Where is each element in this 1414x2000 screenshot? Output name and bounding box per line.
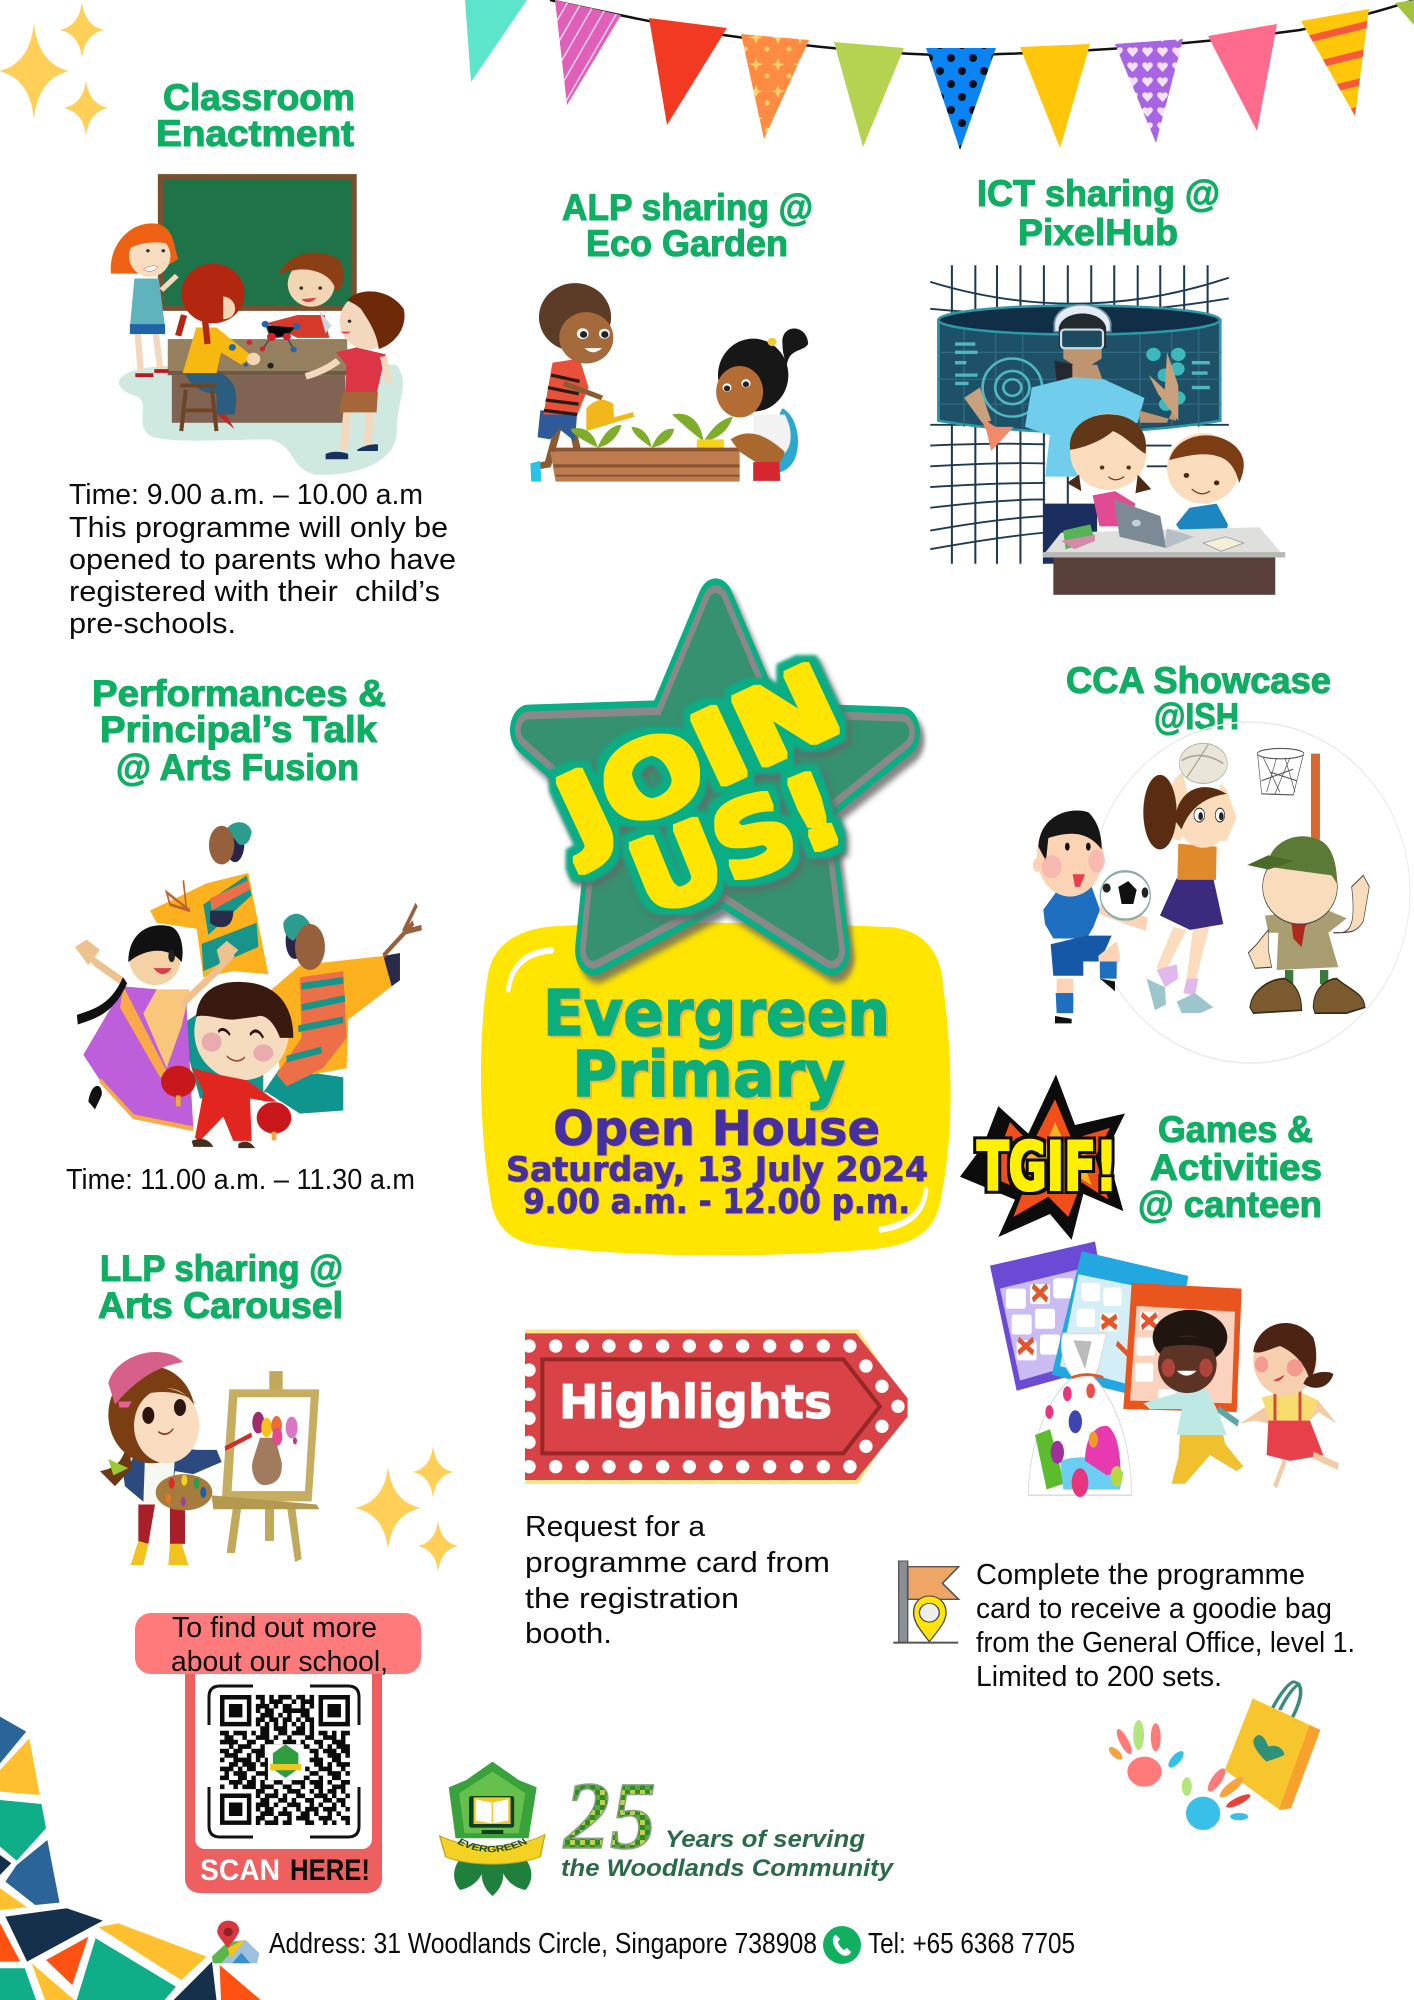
time and registration note: This programme will only be (69, 512, 448, 544)
JOIN US lettering (534, 642, 858, 939)
icon: map pin (212, 1921, 259, 1963)
text: request programme card: programme card from (525, 1547, 830, 1579)
sign board (522, 1329, 908, 1484)
heading: CCA showcase (1066, 660, 1331, 737)
heading: games and activities: Games & (1158, 1109, 1313, 1150)
heading: games and activities: @ canteen (1138, 1184, 1322, 1225)
anniversary tagline: Years of serving (665, 1826, 865, 1853)
address: Address: 31 Woodlands Circle, Singapore 738908 (269, 1928, 817, 1960)
time and registration note (69, 479, 456, 640)
icon: goodie bag and painted hands (1106, 1682, 1320, 1830)
25 years mark: 25 (562, 1762, 656, 1869)
text: request programme card: Request for a (525, 1511, 706, 1543)
JOIN US lettering: US! (615, 750, 858, 939)
heading: classroom enactment: Classroom (163, 77, 355, 118)
callout tab: To find out more (172, 1612, 377, 1644)
heading: LLP sharing: Arts Carousel (98, 1285, 343, 1326)
school name (543, 977, 890, 1111)
illustration: girl painting at easel (100, 1352, 319, 1565)
text: request programme card: the registration (525, 1583, 739, 1615)
scan here label (200, 1854, 370, 1887)
heading: ICT sharing: PixelHub (1018, 212, 1178, 253)
school name: Primary (572, 1038, 845, 1111)
yellow info blob (481, 923, 951, 1255)
star badge (528, 604, 906, 958)
icon: TGIF burst (960, 1075, 1125, 1240)
icon: phone (823, 1926, 861, 1964)
time and registration note: pre-schools. (69, 608, 236, 640)
crest shield: EVERGREEN (457, 1838, 528, 1852)
heading: games and activities: Activities (1150, 1147, 1322, 1188)
school name: Evergreen (543, 977, 890, 1050)
text: request programme card: booth. (525, 1618, 612, 1650)
sign label: Highlights (559, 1375, 832, 1429)
time and registration note: registered with their child’s (69, 576, 440, 608)
bunting banner (465, 0, 1414, 150)
illustration: sports and scout children (1033, 722, 1410, 1063)
panel: central open house badge (481, 604, 951, 1255)
illustration: children in classroom (111, 174, 405, 475)
icon: sparkles top left (0, 2, 108, 136)
school crest logo (438, 1762, 895, 1896)
illustration: dancers and children (75, 822, 422, 1148)
heading: classroom enactment: Enactment (156, 113, 354, 154)
heading: classroom enactment (156, 77, 355, 154)
illustration: bingo cards, goodie sack and children (990, 1242, 1338, 1497)
heading: ALP sharing: ALP sharing @ (562, 187, 813, 228)
heading: LLP sharing: LLP sharing @ (100, 1248, 343, 1289)
callout tab (135, 1612, 421, 1678)
scan here label: SCAN (200, 1854, 280, 1887)
text: goodie bag note: Limited to 200 sets. (976, 1661, 1222, 1693)
open house date and time (506, 1101, 928, 1222)
panel: performances and principal's talk (66, 673, 422, 1196)
anniversary tagline (561, 1826, 895, 1882)
panel: LLP sharing at arts carousel (98, 1248, 458, 1572)
highlights sign (522, 1329, 908, 1484)
heading: ALP sharing (562, 187, 813, 264)
scan here label: HERE! (290, 1854, 370, 1887)
heading: performances: Principal’s Talk (100, 709, 377, 750)
panel: QR code call to action (135, 1612, 421, 1893)
panel: games and activities (960, 1075, 1338, 1497)
JOIN US lettering: JOIN (534, 642, 857, 876)
decorative mosaic bottom left (0, 1717, 261, 2000)
time and registration note: opened to parents who have (69, 544, 456, 576)
heading: ALP sharing: Eco Garden (586, 223, 788, 264)
blob highlights (508, 950, 926, 1230)
telephone: Tel: +65 6368 7705 (868, 1928, 1075, 1960)
illustration: children gardening (530, 283, 808, 482)
panel: ALP sharing at eco garden (530, 187, 813, 482)
callout tab: about our school, (171, 1646, 388, 1678)
open house date and time: Saturday, 13 July 2024 (506, 1150, 928, 1190)
heading: performances (92, 673, 386, 788)
text: goodie bag note: from the General Office, level 1. (976, 1627, 1355, 1659)
heading: performances: Performances & (92, 673, 386, 714)
icon: sparkles lower left (355, 1446, 458, 1572)
heading: LLP sharing (98, 1248, 343, 1326)
contact footer (212, 1921, 1075, 1964)
text: goodie bag note: Complete the programme (976, 1559, 1305, 1591)
text: request programme card (525, 1511, 830, 1650)
time and registration note: Time: 9.00 a.m. – 10.00 a.m (69, 479, 423, 511)
heading: CCA showcase: CCA Showcase (1066, 660, 1331, 701)
QR frame brackets (209, 1686, 359, 1837)
panel: ICT sharing at PixelHub (930, 173, 1285, 595)
heading: CCA showcase: @ISH (1154, 696, 1239, 737)
heading: games and activities (1138, 1109, 1322, 1225)
crest shield (438, 1762, 546, 1896)
heading: ICT sharing: ICT sharing @ (977, 173, 1220, 214)
text: goodie bag note: card to receive a goodie bag (976, 1593, 1332, 1625)
panel: classroom enactment (69, 77, 456, 640)
QR card (185, 1660, 382, 1893)
QR card white area (195, 1660, 372, 1849)
text: goodie bag note (976, 1559, 1355, 1693)
panel: CCA showcase (1033, 660, 1410, 1063)
QR code (220, 1695, 350, 1825)
anniversary tagline: the Woodlands Community (561, 1855, 895, 1882)
time note: Time: 11.00 a.m. – 11.30 a.m (66, 1164, 415, 1196)
icon: TGIF burst: TGIF! (977, 1128, 1117, 1207)
illustration: VR teacher and children at laptop (930, 265, 1285, 595)
open house date and time: Open House (553, 1101, 880, 1157)
icon: flag and location pin (893, 1561, 959, 1644)
heading: performances: @ Arts Fusion (116, 747, 359, 788)
open house date and time: 9.00 a.m. - 12.00 p.m. (523, 1182, 910, 1222)
heading: ICT sharing (977, 173, 1220, 253)
